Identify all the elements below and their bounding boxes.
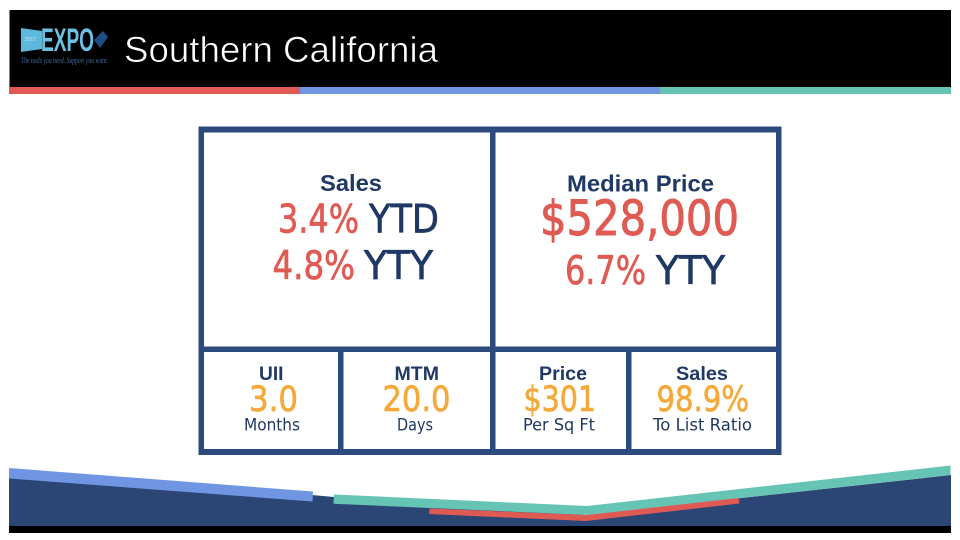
- panel: sales: 3.4%: [278, 198, 359, 242]
- panel: sales to list ratio: [652, 363, 752, 434]
- panel: sales to list ratio: To List Ratio: [652, 416, 752, 434]
- panel: UII: 3.0: [249, 380, 298, 420]
- logo: Expo: [21, 22, 108, 65]
- footer graphic: [9, 466, 951, 533]
- panel: sales to list ratio: 98.9%: [656, 380, 749, 420]
- panel: sales: 4.8%: [272, 244, 355, 289]
- panel: UII: UII: [259, 363, 284, 385]
- panel: sales: [272, 170, 439, 289]
- panel: price per square foot: Per Sq Ft: [523, 416, 596, 434]
- stats frame: [198, 126, 782, 455]
- panel: median price: [540, 170, 739, 294]
- panel: MTM: [382, 363, 450, 434]
- panel: UII: [244, 363, 300, 434]
- panel: MTM: MTM: [394, 363, 439, 385]
- header band: [9, 10, 951, 94]
- panel: price per square foot: $301: [524, 380, 596, 420]
- panel: UII: Months: [244, 416, 300, 434]
- panel: MTM: 20.0: [382, 380, 450, 420]
- logo: Expo: EXPO: [41, 22, 94, 58]
- panel: median price: $528,000: [540, 191, 739, 247]
- panel: sales: Sales: [320, 170, 382, 196]
- panel: median price: 6.7%: [565, 249, 646, 294]
- logo: Expo: 2017: [25, 37, 36, 43]
- panel: median price: Median Price: [567, 170, 714, 196]
- panel: price per square foot: Price: [539, 363, 587, 385]
- panel: MTM: Days: [397, 416, 433, 434]
- panel: sales to list ratio: Sales: [676, 363, 728, 385]
- panel: median price: YTY: [655, 249, 725, 294]
- title: Southern California: [124, 29, 439, 70]
- panel: price per square foot: [523, 363, 596, 434]
- logo: Expo: The tools you need. Support you want.: [21, 56, 108, 65]
- panel: sales: YTD: [368, 198, 439, 242]
- panel: sales: YTY: [363, 244, 433, 289]
